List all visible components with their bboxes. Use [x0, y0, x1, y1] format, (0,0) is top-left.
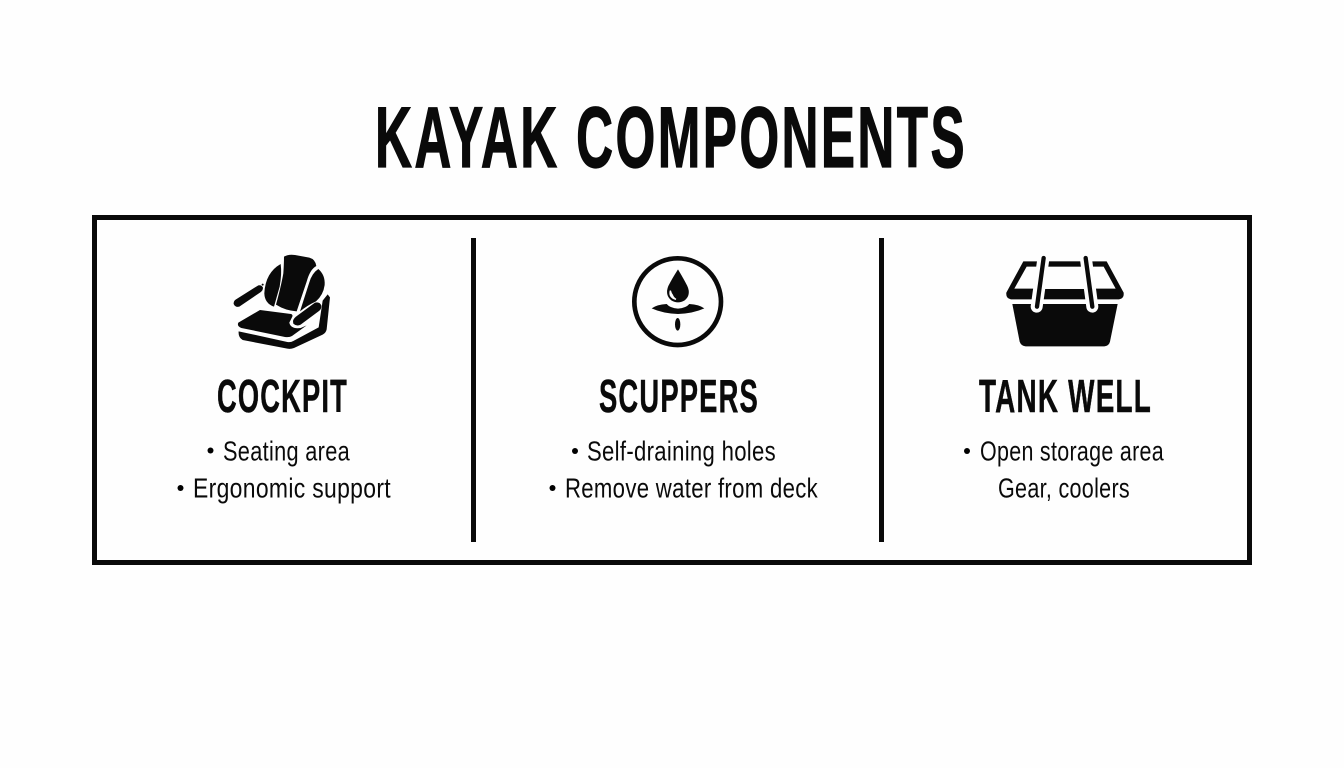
panel: component frame — [94, 218, 1250, 562]
heading: tank well: TANK WELL — [979, 370, 1152, 422]
text: tank well bullets — [964, 436, 1164, 504]
heading: cockpit: COCKPIT — [217, 370, 348, 422]
text: tank well bullets: Gear, coolers — [998, 472, 1130, 504]
text: cockpit bullets: Ergonomic support — [193, 472, 391, 504]
panel: tank well — [964, 257, 1164, 504]
text: cockpit bullets: Seating area — [223, 436, 350, 466]
text: scuppers bullets: Remove water from deck — [565, 472, 818, 504]
text: tank well bullets: Open storage area — [980, 436, 1164, 466]
icon: kayak seat — [234, 255, 330, 349]
icon: storage crate — [1006, 257, 1124, 346]
heading: scuppers: SCUPPERS — [599, 370, 759, 422]
icon: water drain — [634, 258, 721, 345]
panel: scuppers — [550, 258, 818, 504]
text: scuppers bullets — [550, 436, 818, 504]
title: KAYAK COMPONENTS — [375, 90, 967, 186]
text: scuppers bullets: Self-draining holes — [587, 436, 776, 466]
text: cockpit bullets — [178, 436, 391, 504]
panel: cockpit — [178, 255, 391, 504]
